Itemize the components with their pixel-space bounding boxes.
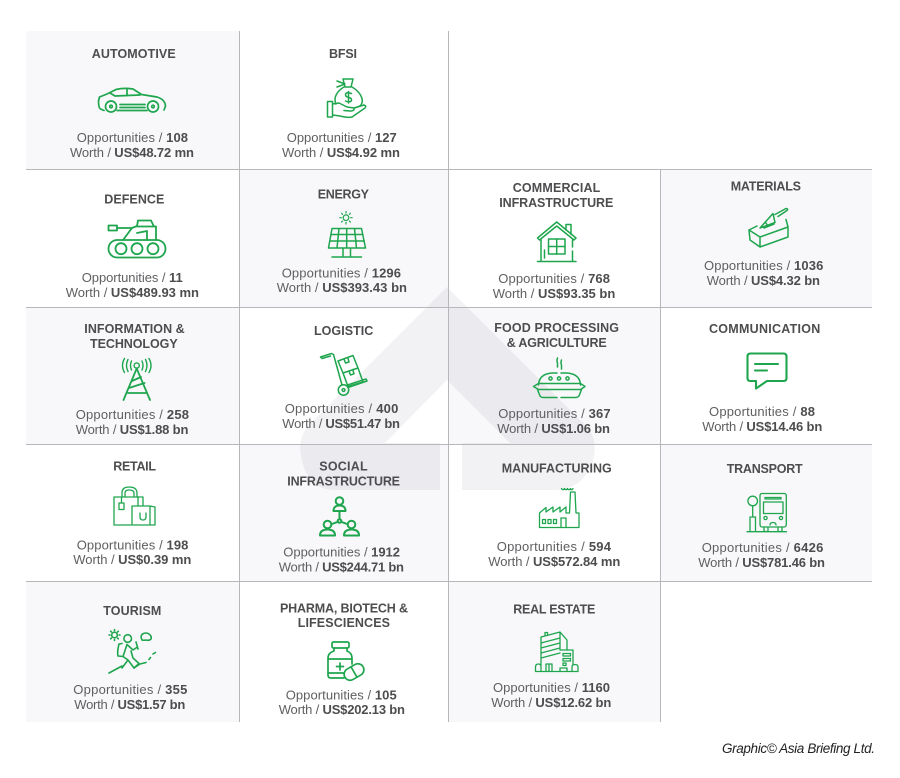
icon: hand truck with boxes [320,354,367,395]
text: transport worth: Worth / US$781.46 bn [698,555,825,570]
text: tourism worth: Worth / US$1.57 bn [74,697,185,712]
icon: solar panel [328,212,366,257]
panel: tourism [26,582,239,722]
text: energy worth: Worth / US$393.43 bn [277,280,407,295]
text: communication worth: Worth / US$14.46 bn [702,419,822,434]
heading: energy: ENERGY [318,187,370,201]
heading: manufacturing: MANUFACTURING [502,461,612,475]
text: materials opportunities: Opportunities / 1036 [704,258,823,273]
heading: pharma, biotech and lifesciences [280,601,408,630]
icon: money bag in hand [328,79,366,117]
text: retail opportunities: Opportunities / 198 [77,537,188,552]
heading: automotive: AUTOMOTIVE [92,47,176,61]
text: transport opportunities: Opportunities / 6426 [702,540,823,555]
heading: social infrastructure: SOCIAL [319,460,368,474]
text: BFSI worth: Worth / US$4.92 mn [282,145,400,160]
heading: information and technology [84,322,185,351]
credit line: Graphic© Asia Briefing Ltd. [722,741,875,756]
text: logistic worth: Worth / US$51.47 bn [282,416,400,431]
heading: information and technology: INFORMATION & [84,322,185,336]
panel: retail [26,445,239,581]
text: pharma worth: Worth / US$202.13 bn [279,702,405,717]
text: communication opportunities: Opportunities / 88 [709,404,815,419]
heading: communication: COMMUNICATION [709,322,820,336]
text: logistic opportunities: Opportunities / 400 [285,401,398,416]
heading: materials: MATERIALS [731,180,801,194]
text: social worth: Worth / US$244.71 bn [279,560,404,574]
icon: medicine bottle and pill [328,642,366,682]
icon: bus stop [747,494,786,532]
text: automotive opportunities: Opportunities / 108 [77,130,188,145]
panel: manufacturing [449,445,660,581]
icon: car [98,88,166,112]
heading: food processing and agriculture [494,321,619,350]
heading: pharma, biotech and lifesciences: LIFESCIENCES [298,616,390,630]
text: tourism opportunities: Opportunities / 355 [73,682,187,697]
panel: BFSI [240,31,448,169]
icon: pie [534,358,585,398]
heading: information and technology: TECHNOLOGY [90,337,178,351]
text: information worth: Worth / US$1.88 bn [76,422,188,437]
icon: signal tower [122,358,151,400]
panel: defence [26,170,239,307]
panel: materials [661,170,872,307]
icon: factory [540,488,579,528]
text: pharma opportunities: Opportunities / 105 [286,687,397,702]
background watermark: house arrow [300,287,595,490]
text: real estate opportunities: Opportunities / 1160 [493,680,610,695]
panel: pharma, biotech and lifesciences [240,582,448,722]
panel: communication [661,308,872,444]
heading: BFSI: BFSI [329,47,357,61]
panel: transport [661,445,872,581]
icon: hiker [109,630,156,673]
heading: logistic: LOGISTIC [314,324,373,338]
text: social opportunities: Opportunities / 1912 [283,545,400,560]
heading: defence: DEFENCE [104,192,164,206]
heading: commercial infrastructure [499,181,613,210]
heading: social infrastructure [287,460,400,488]
icon: shopping bags [114,487,155,525]
icon: brick and trowel [749,208,788,247]
heading: food processing and agriculture: & AGRICULTURE [507,336,607,350]
icon: people network [320,497,359,536]
panel: logistic [240,308,448,444]
text: materials worth: Worth / US$4.32 bn [707,273,820,288]
text: retail worth: Worth / US$0.39 mn [73,552,191,567]
icon: buildings [536,632,578,672]
heading: pharma, biotech and lifesciences: PHARMA, BIOTECH & [280,601,408,615]
text: food opportunities: Opportunities / 367 [498,406,611,421]
text: manufacturing opportunities: Opportunities / 594 [497,539,612,554]
heading: real estate: REAL ESTATE [513,602,595,616]
text: information opportunities: Opportunities / 258 [76,407,189,422]
text: manufacturing worth: Worth / US$572.84 mn [488,554,620,569]
panel: information and technology [26,308,239,444]
text: defence opportunities: Opportunities / 11 [82,270,183,285]
heading: food processing and agriculture: FOOD PROCESSING [494,321,619,335]
heading: transport: TRANSPORT [727,462,803,476]
heading: social infrastructure: INFRASTRUCTURE [287,474,400,488]
heading: retail: RETAIL [113,460,156,474]
panel: social infrastructure [240,445,448,581]
panel: automotive [26,31,239,169]
panel: real estate [449,582,660,722]
text: automotive worth: Worth / US$48.72 mn [70,145,194,160]
panel: commercial infrastructure [449,170,660,307]
heading: commercial infrastructure: COMMERCIAL [513,181,601,195]
text: real estate worth: Worth / US$12.62 bn [491,695,611,710]
text: BFSI opportunities: Opportunities / 127 [287,130,397,145]
text: commercial opportunities: Opportunities / 768 [498,271,610,286]
icon: tank [108,220,166,258]
panel: food processing and agriculture [449,308,660,444]
heading: commercial infrastructure: INFRASTRUCTURE [499,196,613,210]
text: energy opportunities: Opportunities / 1296 [282,265,401,280]
text: defence worth: Worth / US$489.93 mn [66,285,199,300]
heading: tourism: TOURISM [103,604,161,618]
icon: house [538,222,576,262]
text: food worth: Worth / US$1.06 bn [497,421,610,436]
panel: energy [240,170,448,307]
text: commercial worth: Worth / US$93.35 bn [493,286,615,301]
icon: chat bubble [748,354,786,388]
